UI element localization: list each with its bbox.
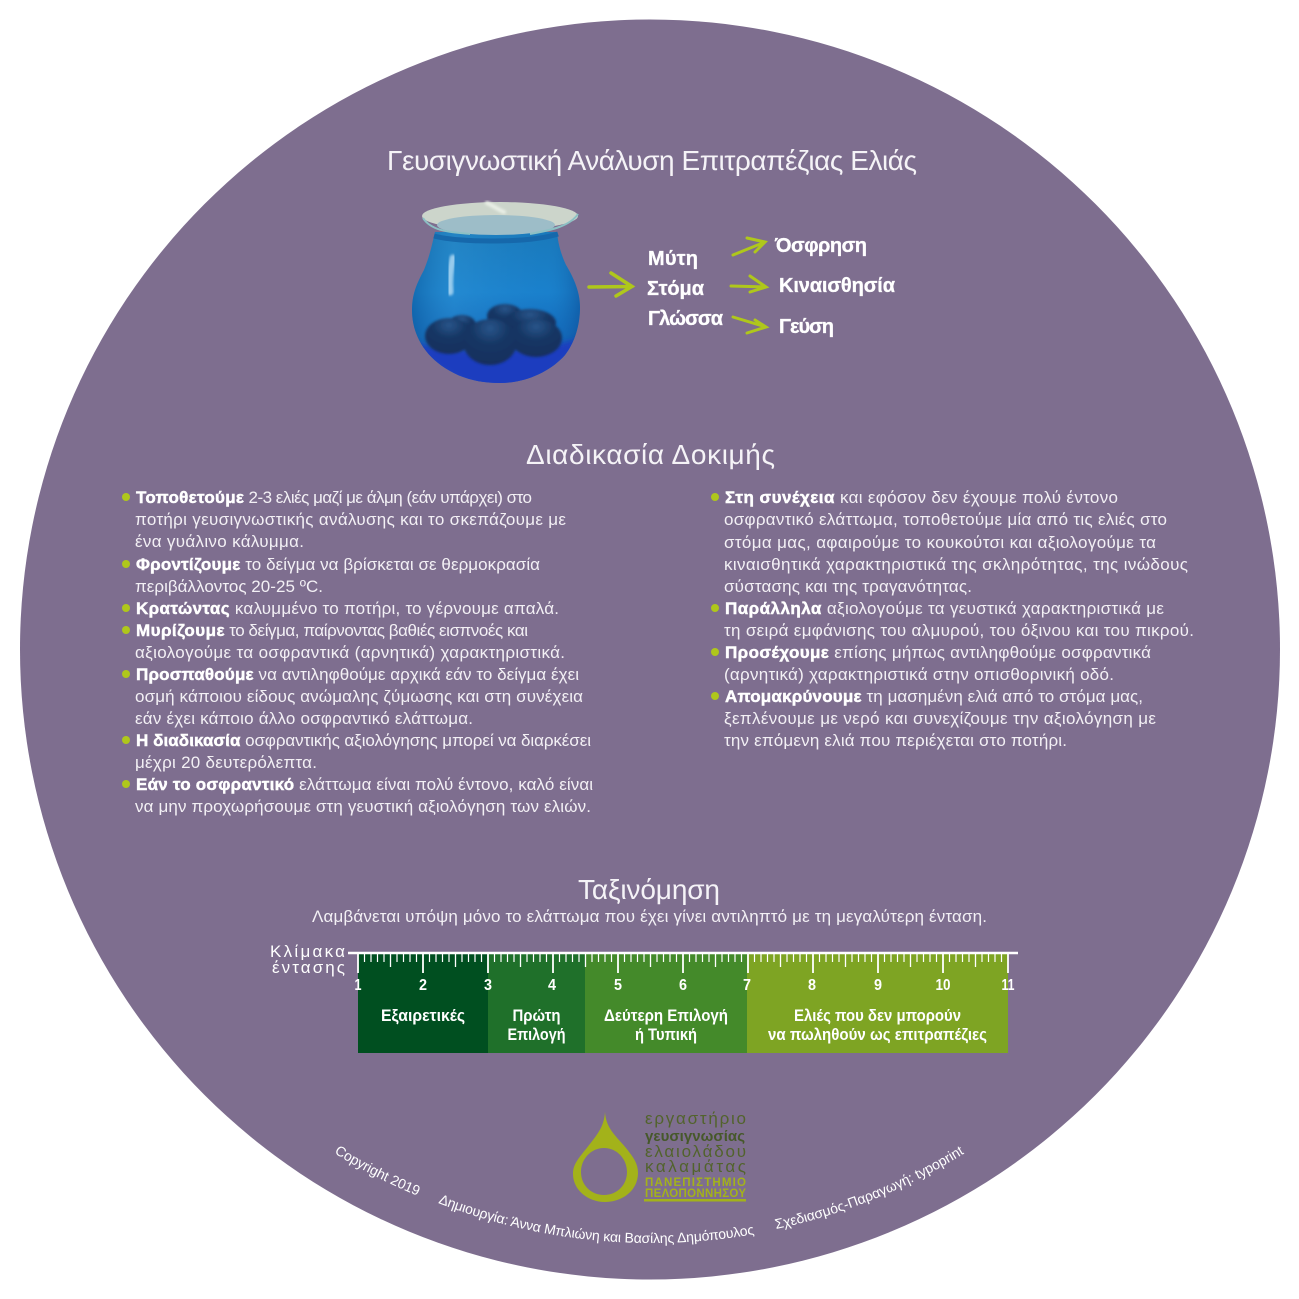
title: Γευσιγνωστική Ανάλυση Επιτραπέζιας Ελιάς [387,145,917,176]
chart: intensity scale [348,953,1018,1053]
ruler [348,953,1018,973]
scale numbers: 7 [743,977,751,994]
organs list: Μύτη [648,248,698,270]
text block: procedure right column: την επόμενη ελιά που περιέχεται στο ποτήρι. [724,731,1067,750]
organs list: Γλώσσα [648,308,724,330]
text block: procedure right column: κιναισθητικά χαρακτηριστικά της σκληρότητας, της ινώδους [724,555,1188,574]
scale numbers: 4 [548,977,556,994]
arrow: glass to senses [589,273,632,296]
text block: procedure left column: εάν έχει κάποιο άλλο οσφραντικό ελάττωμα. [135,709,473,728]
logo wordmark: γευσιγνωσίας [645,1128,745,1145]
scale numbers: 8 [808,977,816,994]
icon: oil drop [573,1112,638,1202]
text block: procedure left column: Τοποθετούμε 2-3 ελιές μαζί με άλμη (εάν υπάρχει) στο [136,488,532,507]
credit: design and production: Σχεδιασμός-Παραγωγή: typoprint [774,1146,964,1230]
text block: procedure right column: Παράλληλα αξιολογούμε τα γευστικά χαρακτηριστικά με [725,599,1164,618]
heading: classification: Ταξινόμηση [578,874,720,905]
text block: procedure left column [122,488,593,816]
text block: procedure left column: Η διαδικασία οσφραντικής αξιολόγησης μπορεί να διαρκέσει [136,731,591,750]
text block: procedure right column [711,488,1194,750]
senses list [774,235,896,338]
category: second choice: Δεύτερη Επιλογή [604,1006,728,1025]
label: intensity scale: έντασης [272,958,345,977]
logo wordmark: ΠΑΝΕΠΙΣΤΗΜΙΟ [645,1177,746,1189]
text block: procedure right column: Απομακρύνουμε τη μασημένη ελιά από το στόμα μας, [725,687,1143,706]
text block: procedure left column: Φροντίζουμε το δείγμα να βρίσκεται σε θερμοκρασία [136,555,540,574]
senses list: Όσφρηση [774,235,867,257]
text block: procedure left column: Εάν το οσφραντικό ελάττωμα είναι πολύ έντονο, καλό είναι [136,775,593,794]
logo wordmark [644,1109,746,1202]
category: first choice [488,953,585,1053]
text block: procedure left column: Κρατώντας καλυμμένο το ποτήρι, το γέρνουμε απαλά. [136,599,559,618]
text block: procedure right column: στόμα μας, αφαιρούμε το κουκούτσι και αξιολογούμε τα [724,533,1156,552]
text block: procedure right column: σύστασης και της τραγανότητας. [724,577,972,596]
scale numbers [354,977,1015,994]
logo: olive oil tasting laboratory [573,1109,746,1202]
logo wordmark: ΠΕΛΟΠΟΝΝΗΣΟΥ [645,1188,746,1200]
logo wordmark: ελαιολάδου [645,1142,746,1161]
arrow: to taste [733,317,766,333]
scale numbers: 10 [936,977,951,994]
category: first choice: Επιλογή [508,1025,566,1044]
text block: procedure left column: Μυρίζουμε το δείγμα, παίρνοντας βαθιές εισπνοές και [136,621,528,640]
category: second choice [585,953,747,1053]
credit: creators: Δημιουργία: Άννα Μπλιώνη και Βασίλης Δημόπουλος [438,1195,754,1246]
scale numbers: 5 [614,977,622,994]
text block: procedure right column: τη σειρά εμφάνισης του αλμυρού, του όξινου και του πικρού. [724,621,1194,640]
text block: procedure left column: αξιολογούμε τα οσφραντικά (αρνητικά) χαρακτηριστικά. [135,643,565,662]
text block: procedure left column: να μην προχωρήσουμε στη γευστική αξιολόγηση των ελιών. [135,797,591,816]
arrow: to smell [733,238,765,255]
text block: procedure right column: (αρνητικά) χαρακτηριστικά στην οπισθορινική οδό. [724,665,1114,684]
text block: procedure left column: ποτήρι γευσιγνωστικής ανάλυσης και το σκεπάζουμε με [135,510,566,529]
text block: procedure left column: μέχρι 20 δευτερόλεπτα. [135,753,317,772]
scale numbers: 6 [679,977,687,994]
heading: test procedure: Διαδικασία Δοκιμής [526,439,775,470]
text block: procedure left column: οσμή κάποιου είδους ανώμαλης ζύμωσης και στη συνέχεια [135,687,583,706]
text block: procedure left column: περιβάλλοντος 20-25 ºC. [135,577,323,596]
label: intensity scale: Κλίμακα [270,942,345,961]
category: not saleable: να πωληθούν ως επιτραπέζιες [768,1025,987,1044]
logo wordmark: καλαμάτας [645,1157,746,1176]
arrow: to kinaesthesia [731,276,766,292]
text block: procedure right column: ξεπλένουμε με νερό και συνεχίζουμε την αξιολόγηση με [724,709,1156,728]
scale numbers: 3 [484,977,492,994]
category: not saleable: Ελιές που δεν μπορούν [794,1006,961,1025]
text block: procedure right column: Προσέχουμε επίσης μήπως αντιληφθούμε οσφραντικά [725,643,1151,662]
category: second choice: ή Τυπική [635,1025,697,1044]
category: first choice: Πρώτη [512,1006,560,1025]
text block: procedure right column: οσφραντικό ελάττωμα, τοποθετούμε μία από τις ελιές στο [724,510,1167,529]
category: not saleable [747,953,1008,1053]
category: excellent: Εξαιρετικές [381,1006,465,1025]
scale numbers: 11 [1002,977,1015,994]
text block: procedure right column: Στη συνέχεια και εφόσον δεν έχουμε πολύ έντονο [725,488,1118,507]
senses list: Κιναισθησία [779,275,896,297]
label: intensity scale [270,942,345,977]
organs list [647,248,724,330]
senses list: Γεύση [779,316,834,338]
text block: classification note: Λαμβάνεται υπόψη μόνο το ελάττωμα που έχει γίνει αντιληπτό με τη μεγαλύτερη ένταση. [312,907,987,926]
scale numbers: 2 [419,977,427,994]
credit: copyright: Copyright 2019 [336,1146,420,1195]
icon: tasting glass with olives [410,202,585,390]
text block: procedure left column: Προσπαθούμε να αντιληφθούμε αρχικά εάν το δείγμα έχει [136,665,579,684]
category: excellent [358,953,488,1053]
scale numbers: 9 [874,977,882,994]
scale numbers: 1 [354,977,362,994]
text block: procedure left column: ένα γυάλινο κάλυμμα. [135,532,304,551]
organs list: Στόμα [647,278,705,300]
logo wordmark: εργαστήριο [645,1109,746,1128]
